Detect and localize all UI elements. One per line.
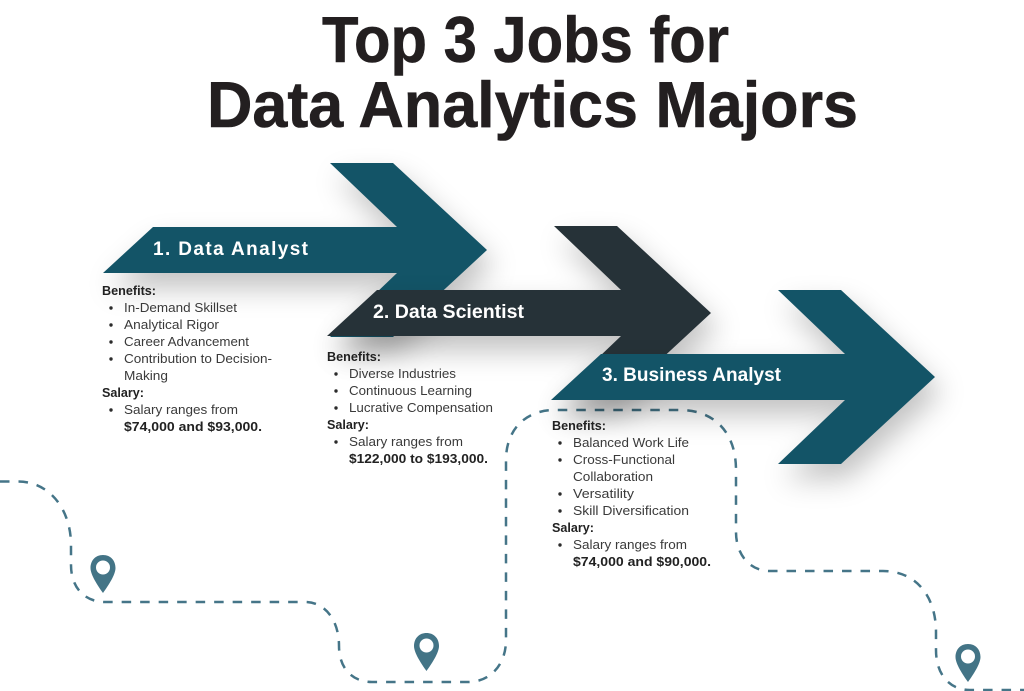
- arrow: 2. Data Scientist: [327, 226, 711, 400]
- arrow: 3. Business Analyst: [551, 290, 935, 464]
- text block: Business Analyst details: Salary ranges from: [573, 537, 687, 552]
- text block: Data Scientist details: $122,000 to $193,000.: [349, 451, 488, 466]
- text block: Data Scientist details: Salary:: [327, 417, 369, 432]
- icon: map pin 3: [956, 644, 980, 682]
- title: Data Analytics Majors: [207, 68, 858, 141]
- text block: Business Analyst details: Skill Diversification: [573, 503, 689, 518]
- text block: Business Analyst details: [552, 418, 711, 569]
- text block: Business Analyst details: Cross-Functional: [573, 452, 675, 467]
- text block: Data Analyst details: Benefits:: [102, 283, 156, 298]
- text block: Business Analyst details: Benefits:: [552, 418, 606, 433]
- text block: Data Analyst details: $74,000 and $93,000.: [124, 419, 262, 434]
- arrow: 1. Data Analyst: [103, 163, 487, 337]
- text block: Data Analyst details: Salary:: [102, 385, 144, 400]
- text block: Business Analyst details: Versatility: [573, 486, 635, 501]
- text block: Data Analyst details: Making: [124, 368, 168, 383]
- text block: Data Scientist details: Lucrative Compensation: [349, 400, 493, 415]
- text block: Business Analyst details: Collaboration: [573, 469, 653, 484]
- icon: map pin 2: [414, 633, 439, 671]
- text block: Data Analyst details: Contribution to Decision-: [124, 351, 272, 366]
- dashed route line: [0, 410, 1024, 690]
- text block: Business Analyst details: Salary:: [552, 520, 594, 535]
- arrow: 1. Data Analyst: 1. Data Analyst: [153, 239, 309, 260]
- text block: Data Scientist details: Continuous Learning: [349, 383, 472, 398]
- text block: Data Analyst details: In-Demand Skillset: [124, 300, 237, 315]
- text block: Data Analyst details: Career Advancement: [124, 334, 249, 349]
- text block: Data Scientist details: Benefits:: [327, 349, 381, 364]
- text block: Data Analyst details: Salary ranges from: [124, 402, 238, 417]
- arrow: 2. Data Scientist: 2. Data Scientist: [373, 302, 525, 323]
- text block: Business Analyst details: Balanced Work Life: [573, 435, 689, 450]
- text block: Data Scientist details: Salary ranges from: [349, 434, 463, 449]
- text block: Data Scientist details: [327, 349, 493, 466]
- text block: Data Analyst details: [102, 283, 272, 434]
- arrow: 3. Business Analyst: 3. Business Analyst: [602, 365, 782, 386]
- icon: map pin 1: [90, 555, 116, 593]
- text block: Business Analyst details: $74,000 and $90,000.: [573, 554, 711, 569]
- title: Top 3 Jobs for: [322, 3, 729, 76]
- text block: Data Scientist details: Diverse Industries: [349, 366, 457, 381]
- text block: Data Analyst details: Analytical Rigor: [124, 317, 220, 332]
- title: [207, 3, 858, 141]
